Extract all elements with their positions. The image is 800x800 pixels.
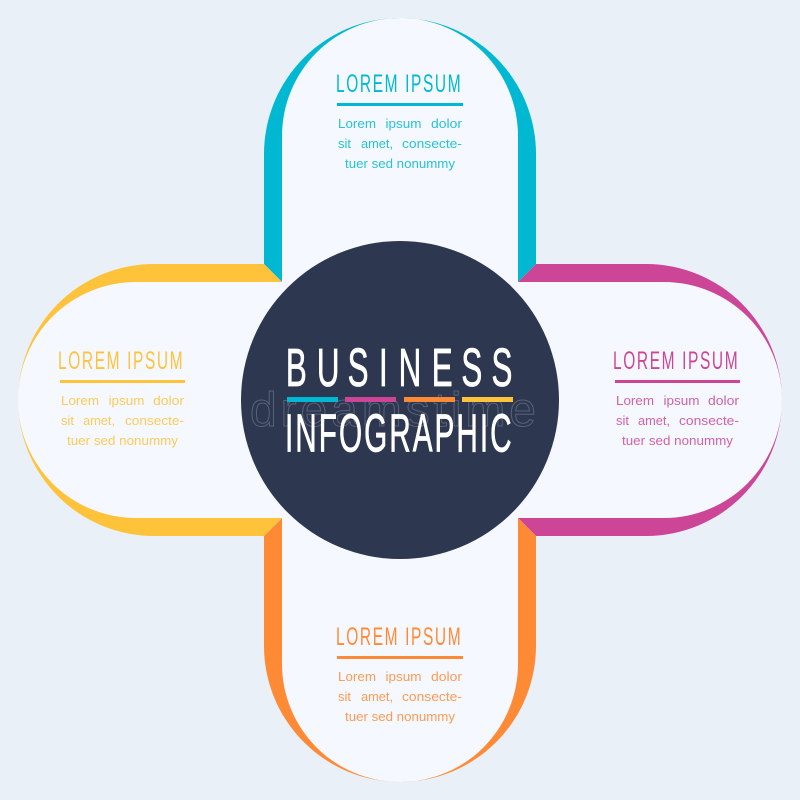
body: left: tuer sed nonummy xyxy=(67,433,179,448)
central dark circle with title xyxy=(241,241,559,559)
heading: right: LOREM IPSUM xyxy=(613,347,738,375)
body: top: tuer sed nonummy xyxy=(345,156,456,171)
panel: bottom orange band xyxy=(264,518,536,782)
body: bottom: consecte- xyxy=(402,689,462,704)
body: top: Lorem xyxy=(338,116,376,131)
text block: right xyxy=(613,347,740,448)
heading: top: LOREM IPSUM xyxy=(336,70,461,98)
body: right: consecte- xyxy=(679,413,739,428)
body: left xyxy=(61,393,185,448)
title: BUSINESS: BUSINESS xyxy=(286,338,512,398)
body: bottom xyxy=(338,669,463,724)
body: left: dolor xyxy=(153,393,185,408)
body: right: ipsum xyxy=(664,393,700,408)
body: left: ipsum xyxy=(108,393,144,408)
text block: top xyxy=(336,70,463,171)
body: right: dolor xyxy=(708,393,740,408)
body: right: tuer sed nonummy xyxy=(622,433,734,448)
watermark: dreamstime xyxy=(250,384,536,437)
heading: left: LOREM IPSUM xyxy=(58,347,183,375)
body: bottom: Lorem xyxy=(338,669,376,684)
body: right xyxy=(616,393,740,448)
body: top: ipsum xyxy=(386,116,422,131)
body: left: consecte- xyxy=(125,413,184,428)
panel: right magenta band xyxy=(518,264,782,536)
body: top: consecte- xyxy=(402,136,462,151)
body: bottom: ipsum xyxy=(386,669,422,684)
colour bars xyxy=(287,397,513,402)
body: top: dolor xyxy=(431,116,463,131)
body: left: amet, xyxy=(83,413,115,428)
body: bottom: amet, xyxy=(361,689,393,704)
title: INFOGRAPHIC: INFOGRAPHIC xyxy=(285,404,512,464)
body: top xyxy=(338,116,463,171)
body: top: sit xyxy=(338,136,351,151)
panel: top cyan band xyxy=(264,18,536,282)
body: left: Lorem xyxy=(61,393,99,408)
body: right: amet, xyxy=(638,413,670,428)
divider: left xyxy=(60,380,185,383)
divider: top xyxy=(337,103,463,106)
body: bottom: dolor xyxy=(431,669,463,684)
divider: right xyxy=(615,380,740,383)
body: left: sit xyxy=(61,413,74,428)
body: right: Lorem xyxy=(616,393,654,408)
divider: bottom xyxy=(337,656,463,659)
body: bottom: tuer sed nonummy xyxy=(345,709,456,724)
panel: left yellow band xyxy=(18,264,282,536)
body: right: sit xyxy=(616,413,629,428)
body: bottom: sit xyxy=(338,689,351,704)
text block: left xyxy=(58,347,185,448)
body: top: amet, xyxy=(361,136,393,151)
text block: bottom xyxy=(336,623,463,724)
heading: bottom: LOREM IPSUM xyxy=(336,623,461,651)
